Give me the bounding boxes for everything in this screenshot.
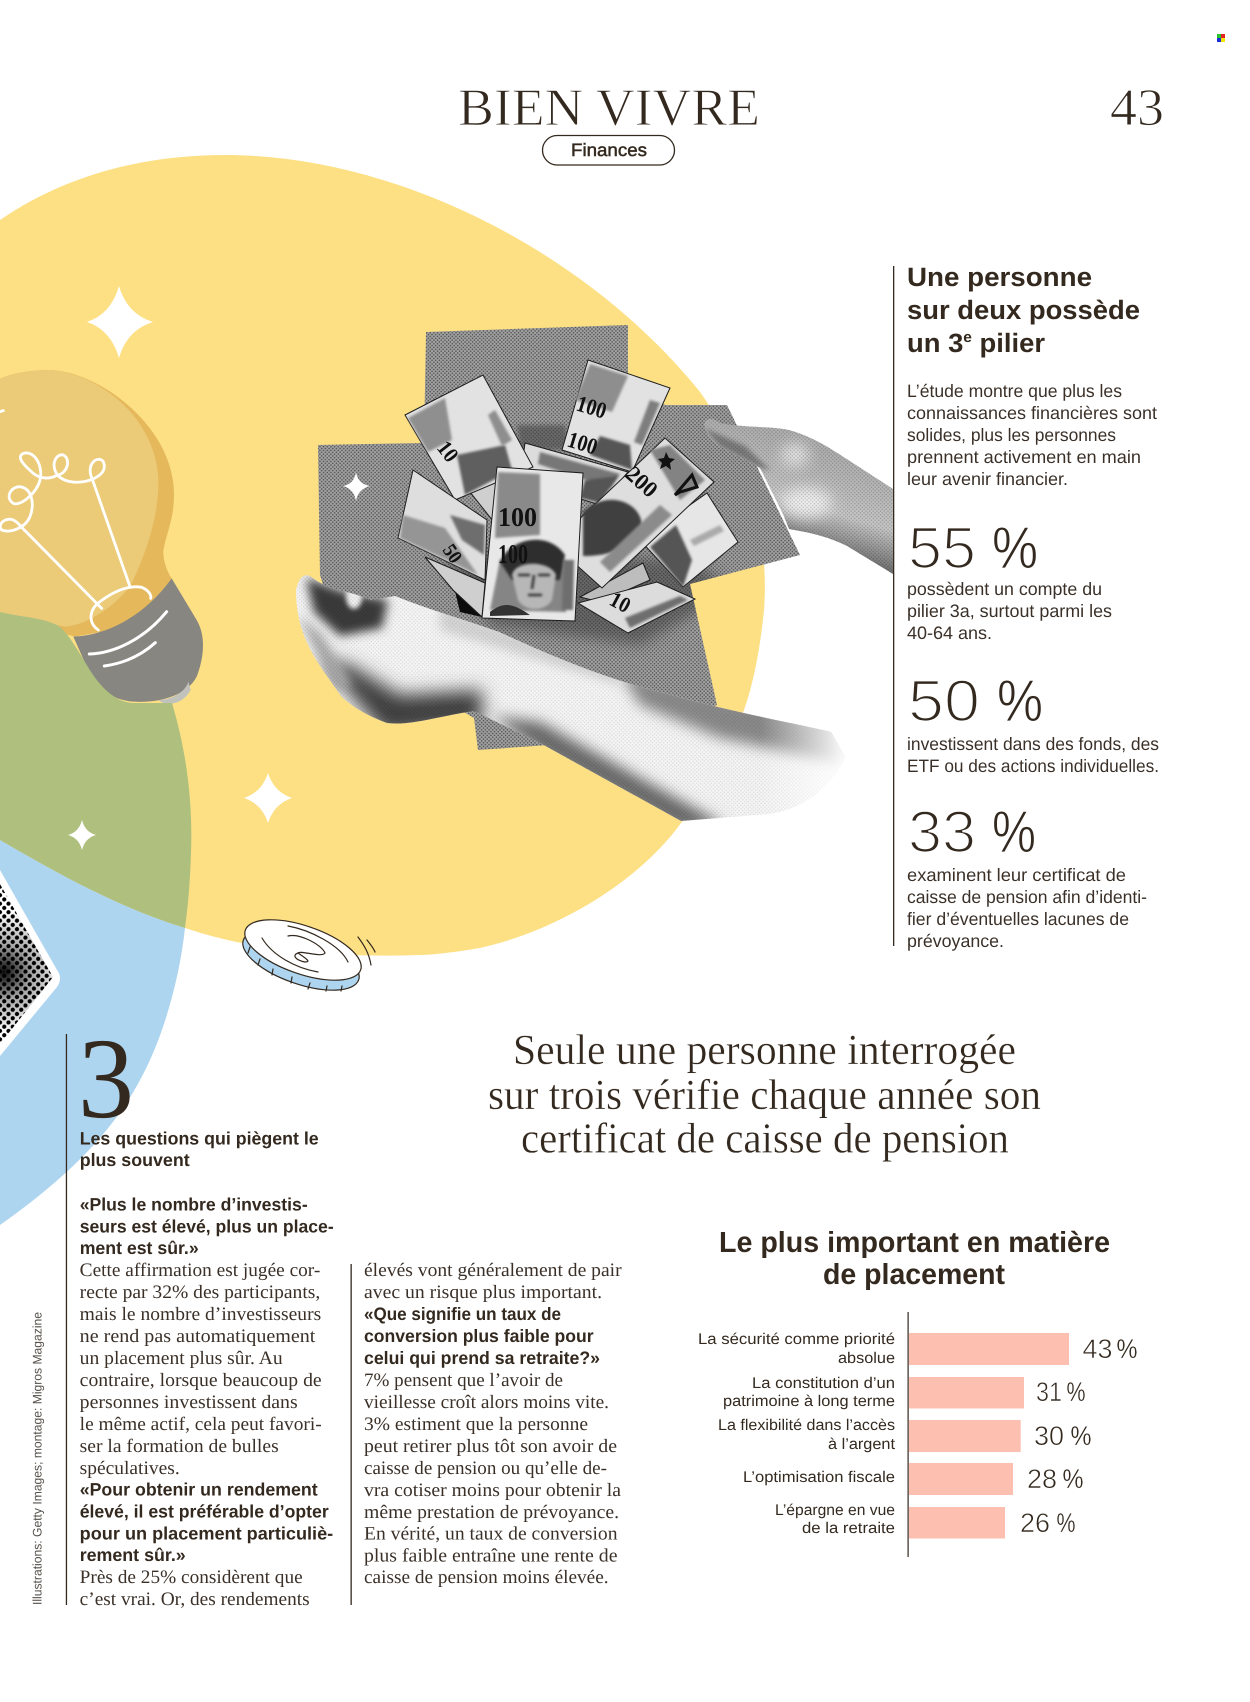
panel: the 3 trick questions xyxy=(66,1015,622,1610)
second column text: vra cotiser moins pour obtenir la xyxy=(364,1480,622,1501)
stat: 55 %: possèdent un compte du xyxy=(907,579,1102,599)
banknote 100 top: 100 xyxy=(565,427,601,460)
stat: 50 %: investissent dans des fonds, des xyxy=(907,734,1159,754)
banknote 100 top xyxy=(562,360,670,472)
first column text: élevé, il est préférable d’opter xyxy=(80,1502,329,1522)
upper right hand xyxy=(704,418,893,574)
tiny colour registration mark xyxy=(1217,34,1225,42)
second column text: même prestation de prévoyance. xyxy=(364,1502,619,1523)
banknote 100 top: 100 xyxy=(574,391,610,424)
first column text: c’est vrai. Or, des rendements xyxy=(80,1589,310,1610)
pull quote: Seule une personne interrogée xyxy=(513,1027,1016,1074)
second column text: avec un risque plus important. xyxy=(364,1282,602,1303)
stat: 33 %: fier d’éventuelles lacunes de xyxy=(907,909,1129,929)
banknote behind left xyxy=(470,478,497,526)
first column text xyxy=(80,1194,334,1610)
bar: flexibility 30 %: La flexibilité dans l’accès xyxy=(718,1417,895,1434)
bar: security 43 %: La sécurité comme priorité xyxy=(698,1331,895,1348)
stat: 55 %: pilier 3a, surtout parmi les xyxy=(907,601,1112,621)
bar: security 43 %: absolue xyxy=(838,1350,895,1367)
second column text: caisse de pension ou qu’elle de- xyxy=(364,1458,607,1479)
bar: tax optimisation 28 % xyxy=(743,1463,1084,1495)
pull quote: sur trois vérifie chaque année son xyxy=(488,1072,1041,1119)
bar: security 43 %: 43 xyxy=(1082,1334,1112,1364)
chart heading: de placement xyxy=(823,1259,1005,1291)
first column text: le même actif, cela peut favori- xyxy=(80,1414,322,1435)
banknote 200: 200 xyxy=(621,461,663,502)
stat: 55 % xyxy=(907,515,1112,643)
title: BIEN VIVRE xyxy=(458,79,760,137)
bar: retirement saving 26 %: % xyxy=(1056,1508,1076,1538)
second column text: plus faible entraîne une rente de xyxy=(364,1546,618,1566)
banknote bottom left xyxy=(425,557,485,617)
first column text: rement sûr.» xyxy=(80,1545,186,1565)
intro text: prennent activement en main xyxy=(907,447,1141,467)
stat: 33 %: examinent leur certificat de xyxy=(907,865,1126,885)
second column text: élevés vont généralement de pair xyxy=(364,1260,622,1281)
bar: wealth building 31 % xyxy=(723,1375,1086,1410)
first column text: «Pour obtenir un rendement xyxy=(80,1480,318,1500)
yellow blob xyxy=(0,155,765,956)
stat: 55 %: % xyxy=(992,515,1038,581)
panel: third pillar key figures xyxy=(893,262,1159,951)
stat: 33 % xyxy=(907,799,1147,951)
second column text: «Que signifie un taux de xyxy=(364,1304,561,1324)
first column text: «Plus le nombre d’investis- xyxy=(80,1194,308,1214)
first column text: ser la formation de bulles xyxy=(80,1436,279,1457)
stat: 33 %: % xyxy=(992,799,1036,865)
lower arm and hand xyxy=(296,575,845,821)
bar: wealth building 31 %: patrimoine à long terme xyxy=(723,1393,895,1410)
banknote F xyxy=(640,493,738,587)
bar: flexibility 30 %: à l’argent xyxy=(828,1436,896,1453)
banknote 200 xyxy=(553,438,714,588)
stat: 33 %: caisse de pension afin d’identi- xyxy=(907,887,1147,907)
bar: retirement saving 26 %: 26 xyxy=(1020,1508,1050,1538)
first column text: mais le nombre d’investisseurs xyxy=(80,1304,321,1325)
stat: 50 %: ETF ou des actions individuelles. xyxy=(907,756,1159,776)
image credit: Illustrations: Getty Images; montage: Migros Magazine xyxy=(30,1312,44,1605)
first column text: recte par 32% des participants, xyxy=(80,1282,320,1303)
bar: retirement saving 26 %: L’épargne en vue xyxy=(775,1502,895,1519)
first column text: ment est sûr.» xyxy=(80,1238,199,1258)
page number: 43 xyxy=(1110,79,1164,137)
shadows below banknotes xyxy=(440,425,735,645)
banknote 100 front with portrait xyxy=(482,467,583,621)
bar: wealth building 31 %: % xyxy=(1066,1377,1086,1407)
bar: tax optimisation 28 %: L’optimisation fiscale xyxy=(743,1469,895,1486)
first column text: un placement plus sûr. Au xyxy=(80,1348,283,1369)
first column text: spéculatives. xyxy=(80,1458,180,1479)
bar: flexibility 30 % xyxy=(718,1417,1092,1453)
banknote 100 front with portrait: 100 xyxy=(498,539,528,569)
bar: flexibility 30 %: % xyxy=(1070,1421,1092,1451)
green overlap xyxy=(0,612,191,928)
second column text: 3% estiment que la personne xyxy=(364,1414,588,1435)
section pill: Finances xyxy=(542,136,674,165)
panel heading: plus souvent xyxy=(80,1150,190,1170)
pull quote: certificat de caisse de pension xyxy=(521,1116,1009,1162)
section pill: Finances: Finances xyxy=(571,140,647,160)
banknote 100 front with portrait: 100 xyxy=(498,502,537,532)
panel heading: un 3 xyxy=(907,328,961,358)
icon: light bulb xyxy=(0,370,203,704)
bar: wealth building 31 %: 31 xyxy=(1036,1377,1062,1407)
bar: tax optimisation 28 %: 28 xyxy=(1027,1464,1057,1494)
banknote 50 xyxy=(398,470,487,580)
bar: wealth building 31 %: La constitution d’un xyxy=(752,1375,895,1392)
first column text: pour un placement particuliè- xyxy=(80,1524,333,1544)
second column text: En vérité, un taux de conversion xyxy=(364,1524,618,1544)
panel heading: e xyxy=(963,329,972,346)
second column text: conversion plus faible pour xyxy=(364,1326,594,1346)
stat: 50 %: % xyxy=(997,668,1043,734)
panel heading xyxy=(907,262,1140,358)
stat: 50 % xyxy=(907,668,1159,776)
second column text: celui qui prend sa retraite?» xyxy=(364,1348,600,1368)
chart heading xyxy=(719,1227,1110,1291)
illustration: background colour shapes xyxy=(0,155,765,1225)
bar: tax optimisation 28 %: % xyxy=(1062,1464,1084,1494)
intro text: connaissances financières sont xyxy=(907,403,1157,423)
panel heading xyxy=(80,1128,319,1170)
banknote 10 bottom xyxy=(578,582,695,633)
illustration: hands holding banknotes xyxy=(290,325,895,830)
stat: 50 %: 50 xyxy=(908,668,980,734)
banknote K xyxy=(580,563,650,602)
panel heading: sur deux possède xyxy=(907,295,1140,325)
bar chart: most important in investing xyxy=(698,1312,1138,1557)
second column text xyxy=(364,1260,622,1588)
second column text: peut retirer plus tôt son avoir de xyxy=(364,1436,617,1457)
bar: security 43 %: % xyxy=(1116,1334,1138,1364)
intro text xyxy=(907,381,1157,489)
bar: flexibility 30 %: 30 xyxy=(1034,1421,1064,1451)
pull quote xyxy=(488,1027,1041,1162)
icon: halftone shape at left edge xyxy=(0,870,60,1056)
stat: 33 %: prévoyance. xyxy=(907,931,1004,951)
first column text: Près de 25% considèrent que xyxy=(80,1567,303,1588)
big numeral 3: 3 xyxy=(78,1015,134,1142)
banknote 10 bottom: 10 xyxy=(606,586,635,618)
bar: security 43 % xyxy=(698,1331,1138,1367)
icon: coin xyxy=(236,907,375,1003)
panel heading: Les questions qui piègent le xyxy=(80,1128,319,1148)
intro text: leur avenir financier. xyxy=(907,469,1068,489)
first column text: Cette affirmation est jugée cor- xyxy=(80,1260,320,1281)
second column text: 7% pensent que l’avoir de xyxy=(364,1370,563,1391)
icon: sparkles xyxy=(68,286,292,850)
banknote 10 left xyxy=(405,375,533,500)
stat: 55 %: 55 xyxy=(908,515,976,581)
first column text: personnes investissent dans xyxy=(80,1392,298,1413)
intro text: solides, plus les personnes xyxy=(907,425,1116,445)
intro text: L’étude montre que plus les xyxy=(907,381,1122,401)
banknotes back xyxy=(398,360,738,633)
panel heading: Une personne xyxy=(907,262,1092,292)
paper sparkle xyxy=(343,472,370,501)
second column text: vieillesse croît alors moins vite. xyxy=(364,1392,609,1413)
first column text: ne rend pas automatiquement xyxy=(80,1326,316,1347)
panel heading: pilier xyxy=(972,328,1045,358)
bar: retirement saving 26 %: de la retraite xyxy=(802,1520,895,1537)
first column text: seurs est élevé, plus un place- xyxy=(80,1216,334,1236)
blue circle xyxy=(0,840,185,1225)
stat: 55 %: 40-64 ans. xyxy=(907,623,992,643)
banknote 10 left: 10 xyxy=(432,436,464,467)
bar: retirement saving 26 % xyxy=(775,1502,1076,1538)
chart heading: Le plus important en matière xyxy=(719,1227,1110,1259)
stat: 33 %: 33 xyxy=(908,799,976,865)
second column text: caisse de pension moins élevée. xyxy=(364,1567,609,1588)
first column text: contraire, lorsque beaucoup de xyxy=(80,1370,322,1391)
grey paper xyxy=(318,325,800,750)
banknote 50: 50 xyxy=(438,540,466,568)
banknote middle back xyxy=(520,443,628,505)
